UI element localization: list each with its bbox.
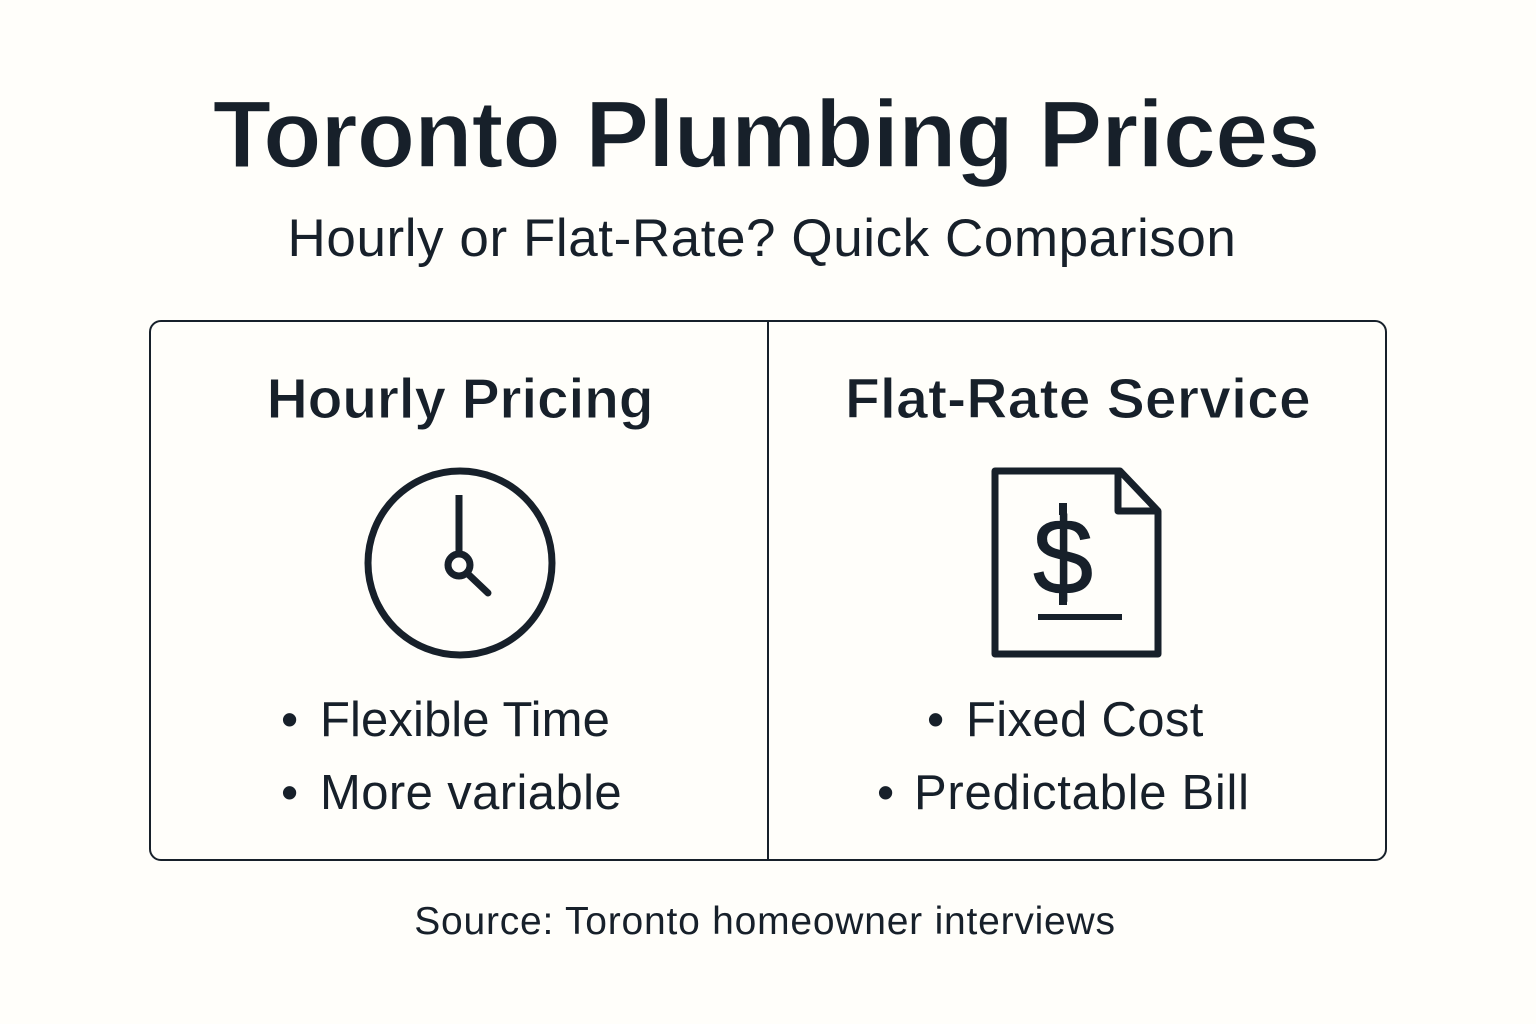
bullet list: hourly — [281, 693, 622, 820]
panel: flat-rate service — [845, 367, 1311, 820]
comparison table — [149, 320, 1387, 861]
heading: flat-rate service: Flat-Rate Service — [845, 367, 1311, 431]
panel: hourly pricing — [267, 367, 653, 820]
source note: Source: Toronto homeowner interviews — [414, 900, 1116, 943]
bullet: fixed cost: Fixed Cost — [966, 693, 1204, 747]
bullet list: flat-rate — [877, 693, 1250, 820]
bullet: flexible time: • — [281, 693, 298, 747]
bullet: flexible time: Flexible Time — [320, 693, 610, 747]
heading: hourly pricing: Hourly Pricing — [267, 367, 653, 431]
subtitle: Hourly or Flat-Rate? Quick Comparison — [288, 209, 1236, 268]
title: Toronto Plumbing Prices — [213, 81, 1319, 188]
column divider — [767, 322, 769, 859]
bullet: more variable: More variable — [320, 766, 622, 820]
icon: invoice with dollar sign — [992, 468, 1162, 658]
bullet: predictable bill: Predictable Bill — [914, 766, 1250, 820]
icon: clock — [364, 468, 556, 658]
bullet: fixed cost: • — [927, 693, 945, 747]
icon: invoice with dollar sign: $ — [1033, 496, 1093, 617]
bullet: predictable bill: • — [877, 766, 895, 820]
bullet: more variable: • — [281, 766, 299, 820]
